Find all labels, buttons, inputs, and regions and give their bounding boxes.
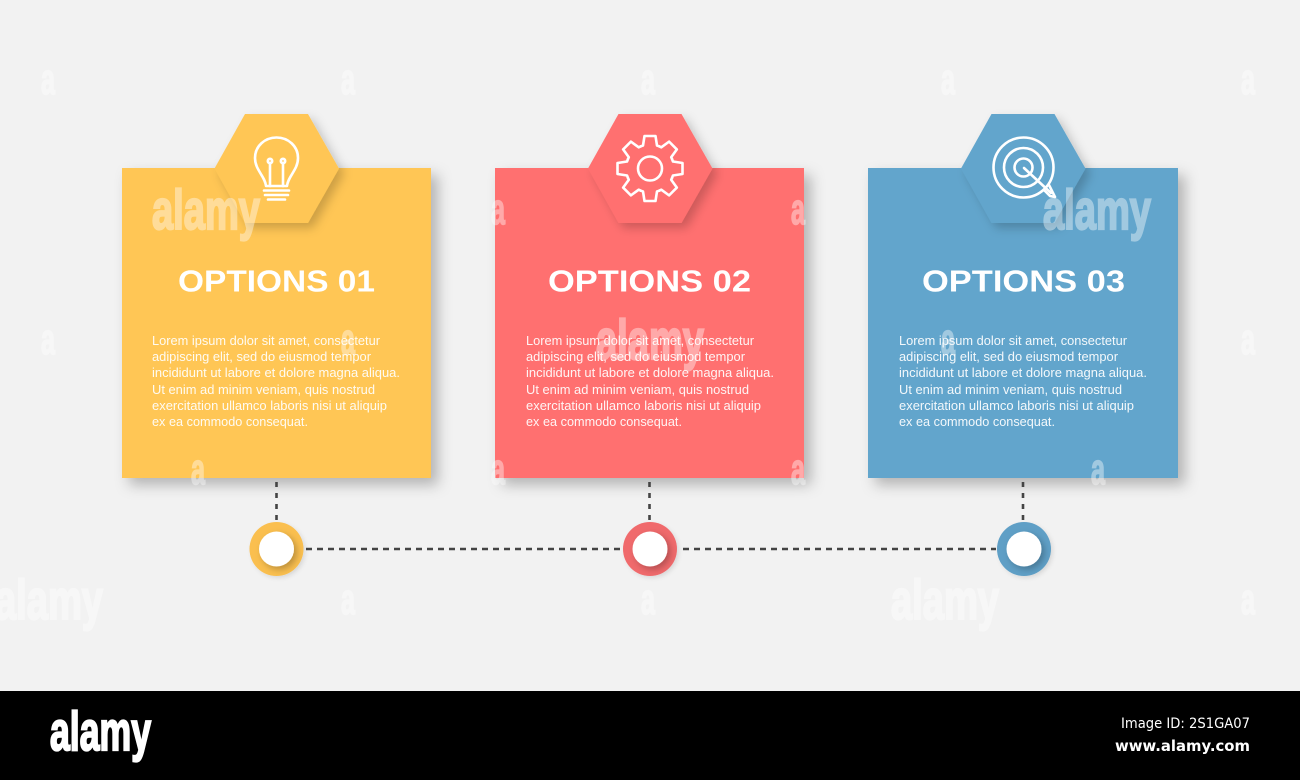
- text block: options 01: ex ea commodo consequat.: [152, 414, 308, 429]
- card: red: [495, 168, 804, 478]
- watermarks: a: [641, 575, 655, 624]
- text block: options 02: incididunt ut labore et dolore magna aliqua.: [526, 365, 774, 380]
- text block: options 02: exercitation ullamco laboris nisi ut aliquip: [526, 398, 761, 413]
- panel: options 02: [495, 114, 804, 478]
- watermarks: alamy: [152, 178, 260, 241]
- watermarks: a: [1241, 315, 1255, 364]
- text block: options 03: Lorem ipsum dolor sit amet, consectetur: [899, 333, 1128, 348]
- icon: light bulb: [255, 138, 298, 200]
- timeline connectors: [276, 482, 1023, 549]
- timeline node: 01: [250, 522, 304, 576]
- timeline node: 02: [623, 522, 677, 576]
- text block: options 02: adipiscing elit, sed do eiusmod tempor: [526, 349, 746, 364]
- watermarks: a: [41, 315, 55, 364]
- text block: options 01: exercitation ullamco laboris nisi ut aliquip: [152, 398, 387, 413]
- watermarks: a: [1241, 575, 1255, 624]
- text block: options 03: [899, 333, 1147, 429]
- text block: options 02: [526, 333, 774, 429]
- watermarks: [0, 55, 1255, 631]
- watermarks: a: [1091, 445, 1105, 494]
- image id: Image ID: 2S1GA07: [1121, 716, 1250, 732]
- watermarks: alamy: [596, 308, 704, 371]
- watermarks: a: [491, 185, 505, 234]
- card: blue: [868, 168, 1178, 478]
- hexagon: blue: [961, 114, 1086, 223]
- timeline node: 03: [997, 522, 1051, 576]
- heading: options 01: OPTIONS 01: [178, 264, 375, 298]
- website: www.alamy.com: [1115, 737, 1250, 755]
- watermarks: a: [41, 55, 55, 104]
- footer logo: alamy: [50, 700, 151, 762]
- watermarks: a: [941, 315, 955, 364]
- text block: options 01: adipiscing elit, sed do eiusmod tempor: [152, 349, 372, 364]
- watermarks: a: [341, 315, 355, 364]
- text block: options 01: Lorem ipsum dolor sit amet, consectetur: [152, 333, 381, 348]
- text block: options 01: Ut enim ad minim veniam, quis nostrud: [152, 382, 375, 397]
- watermarks: a: [341, 575, 355, 624]
- watermarks: a: [641, 55, 655, 104]
- watermarks: a: [1241, 55, 1255, 104]
- hexagon: red: [588, 114, 712, 223]
- watermarks: alamy: [1043, 178, 1151, 241]
- watermarks: a: [491, 445, 505, 494]
- icon: target with arrow: [994, 138, 1055, 198]
- card: yellow: [122, 168, 431, 478]
- icon: gear: [618, 136, 682, 201]
- text block: options 03: Ut enim ad minim veniam, quis nostrud: [899, 382, 1122, 397]
- panel: options 03: [868, 114, 1178, 478]
- text block: options 01: [152, 333, 400, 429]
- watermarks: a: [791, 185, 805, 234]
- panel: options 01: [122, 114, 431, 478]
- watermarks: a: [341, 55, 355, 104]
- watermarks: a: [791, 445, 805, 494]
- text block: options 02: Ut enim ad minim veniam, quis nostrud: [526, 382, 749, 397]
- hexagon: yellow: [214, 114, 339, 223]
- text block: options 02: Lorem ipsum dolor sit amet, consectetur: [526, 333, 755, 348]
- text block: options 03: adipiscing elit, sed do eiusmod tempor: [899, 349, 1119, 364]
- text block: options 03: ex ea commodo consequat.: [899, 414, 1055, 429]
- watermarks: a: [941, 55, 955, 104]
- text block: options 02: ex ea commodo consequat.: [526, 414, 682, 429]
- heading: options 03: OPTIONS 03: [922, 264, 1125, 298]
- text block: options 03: exercitation ullamco laboris nisi ut aliquip: [899, 398, 1134, 413]
- text block: options 01: incididunt ut labore et dolore magna aliqua.: [152, 365, 400, 380]
- footer bar: [0, 691, 1300, 780]
- watermarks: alamy: [891, 568, 999, 631]
- text block: options 03: incididunt ut labore et dolore magna aliqua.: [899, 365, 1147, 380]
- heading: options 02: OPTIONS 02: [548, 264, 751, 298]
- watermarks: a: [191, 445, 205, 494]
